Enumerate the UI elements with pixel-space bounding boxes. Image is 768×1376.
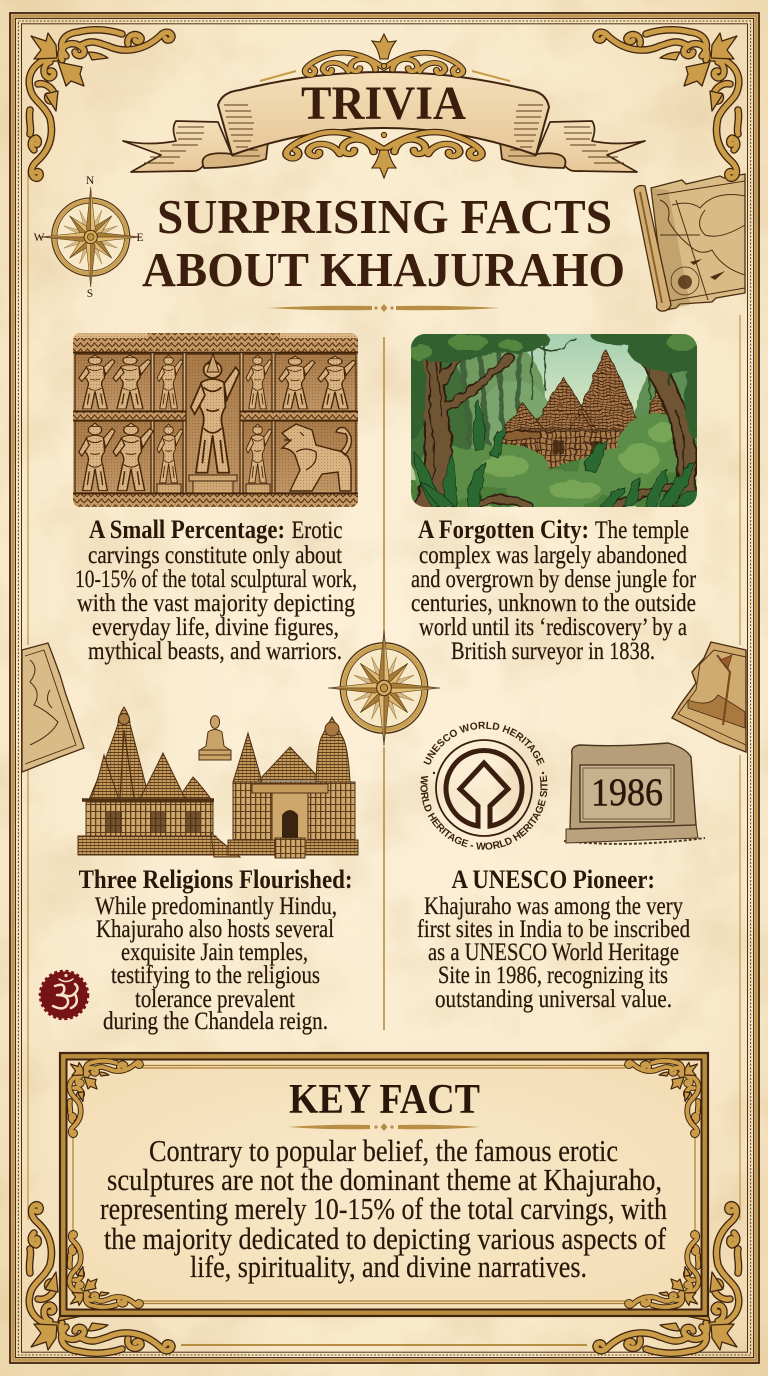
horizontal divider: [104, 687, 664, 689]
main title: SURPRISING FACTS: [157, 189, 612, 244]
text: a forgotten city: and overgrown by dense jungle for: [411, 566, 697, 593]
carved niches: [75, 354, 356, 493]
text: three religions: tolerance prevalent: [135, 986, 295, 1013]
text: unesco pioneer: Khajuraho was among the very: [424, 893, 683, 920]
corner ornament: bottom left: [29, 1205, 172, 1353]
left map fragment: [22, 643, 84, 772]
fern leaves: [414, 400, 700, 507]
text: unesco pioneer: as a UNESCO World Heritage: [428, 939, 679, 966]
icon: om seal: [40, 972, 88, 1018]
banner title: TRIVIA: [301, 77, 466, 130]
compass letters: S: [87, 288, 93, 300]
key fact body: life, spirituality, and divine narratives.: [190, 1249, 587, 1284]
ornament above banner: [260, 34, 510, 81]
tree canopy: [411, 334, 697, 440]
key fact frame: [60, 1053, 708, 1316]
vertical divider: [383, 337, 385, 1030]
text: a forgotten city: centuries, unknown to the outside: [411, 590, 696, 617]
text: a small percentage: [75, 515, 357, 665]
key fact corner ornaments: [70, 1061, 698, 1307]
banner ribbon: [218, 72, 549, 155]
text: unesco pioneer: first sites in India to be inscribed: [417, 916, 690, 943]
text: a small percentage: Erotic: [292, 517, 342, 544]
key fact divider: [288, 1123, 480, 1131]
text: three religions: Three Religions Flourished:: [79, 865, 353, 894]
key fact body: Contrary to popular belief, the famous erotic: [149, 1133, 618, 1168]
distant tree trunks: [462, 345, 520, 445]
panel: small percentage illustration (relief carving): [73, 333, 358, 507]
text: three religions: testifying to the religious: [111, 962, 320, 989]
text: a small percentage: 10-15% of the total sculptural work,: [75, 566, 357, 593]
text: three religions: Khajuraho also hosts several: [96, 916, 334, 943]
text: three religions: While predominantly Hindu,: [95, 893, 337, 920]
compass rose: top left: [34, 175, 144, 300]
key fact heading: KEY FACT: [289, 1077, 480, 1123]
banner tail: right: [500, 121, 645, 172]
right map fragment with quill: [672, 642, 746, 752]
foreground bushes: [411, 438, 697, 507]
title divider: [268, 304, 500, 312]
text: unesco pioneer: outstanding universal value.: [435, 986, 672, 1013]
emblem ring text: [420, 722, 548, 850]
text: a forgotten city: British surveyor in 1838.: [451, 638, 655, 665]
stone year: 1986: [591, 771, 663, 814]
1986 stone plaque: [564, 743, 705, 844]
carved lion: [282, 424, 352, 491]
main title: [142, 189, 625, 297]
text: a small percentage: with the vast majority depicting: [77, 590, 355, 617]
text: a small percentage: mythical beasts, and warriors.: [88, 638, 342, 665]
text: three religions: during the Chandela reign.: [103, 1008, 328, 1035]
text: three religions: exquisite Jain temples,: [121, 939, 308, 966]
key fact inner rules: [73, 1066, 695, 1304]
emblem ring text: WORLD HERITAGE - WORLD HERITAGE SITE: [420, 776, 548, 850]
text: unesco pioneer: [417, 865, 690, 1013]
temple complex: [498, 349, 669, 474]
compass letters: N: [86, 175, 95, 187]
illustration: hindu and jain temples: [78, 707, 358, 858]
text: three religions: [79, 865, 353, 1035]
banner tail: left: [123, 121, 268, 172]
ornament below banner: [286, 132, 482, 178]
compass letters: [34, 175, 144, 300]
trivia banner: [123, 72, 645, 172]
compass letters: E: [136, 232, 144, 244]
tree trunks and branches: [424, 335, 687, 510]
text: a forgotten city: The temple: [595, 517, 689, 544]
key fact body: [100, 1133, 667, 1284]
frieze bands: [73, 333, 358, 507]
text: unesco pioneer: Site in 1986, recognizing its: [438, 962, 668, 989]
text: a forgotten city: [411, 515, 697, 665]
text: a forgotten city: A Forgotten City:: [418, 515, 589, 544]
panel: forgotten city illustration (jungle temple): [411, 334, 697, 507]
unesco emblem: [420, 722, 548, 850]
text: a small percentage: carvings constitute only about: [88, 542, 342, 569]
text: a forgotten city: world until its ‘rediscovery’ by a: [419, 614, 687, 641]
text: a forgotten city: complex was largely abandoned: [419, 542, 687, 569]
text: a small percentage: A Small Percentage:: [89, 515, 285, 544]
stone texture: [73, 333, 358, 507]
background forest: [411, 352, 697, 474]
compass rose: center: [328, 630, 440, 746]
central deity crown and pedestal: [157, 354, 270, 493]
carved figures: [79, 355, 356, 491]
panel: key fact: [60, 1053, 708, 1316]
key fact body: representing merely 10-15% of the total carvings, with: [100, 1191, 667, 1226]
hanging vines: [532, 337, 668, 400]
corner ornament: top right: [596, 30, 739, 178]
key fact body: the majority dedicated to depicting various aspects of: [104, 1221, 667, 1256]
key fact body: sculptures are not the dominant theme at Khajuraho,: [107, 1162, 662, 1197]
corner ornament: top left: [29, 30, 172, 178]
seated jain figure: [199, 716, 231, 760]
main title: ABOUT KHAJURAHO: [142, 242, 625, 297]
top right map scroll: [634, 174, 745, 311]
text: a small percentage: everyday life, divine figures,: [92, 614, 339, 641]
left temple: [78, 707, 240, 857]
text: unesco pioneer: A UNESCO Pioneer:: [452, 865, 655, 894]
corner ornament: bottom right: [596, 1205, 739, 1353]
right temple: [228, 717, 358, 858]
emblem ring text: UNESCO WORLD HERITAGE: [423, 722, 544, 766]
compass letters: W: [34, 232, 45, 244]
